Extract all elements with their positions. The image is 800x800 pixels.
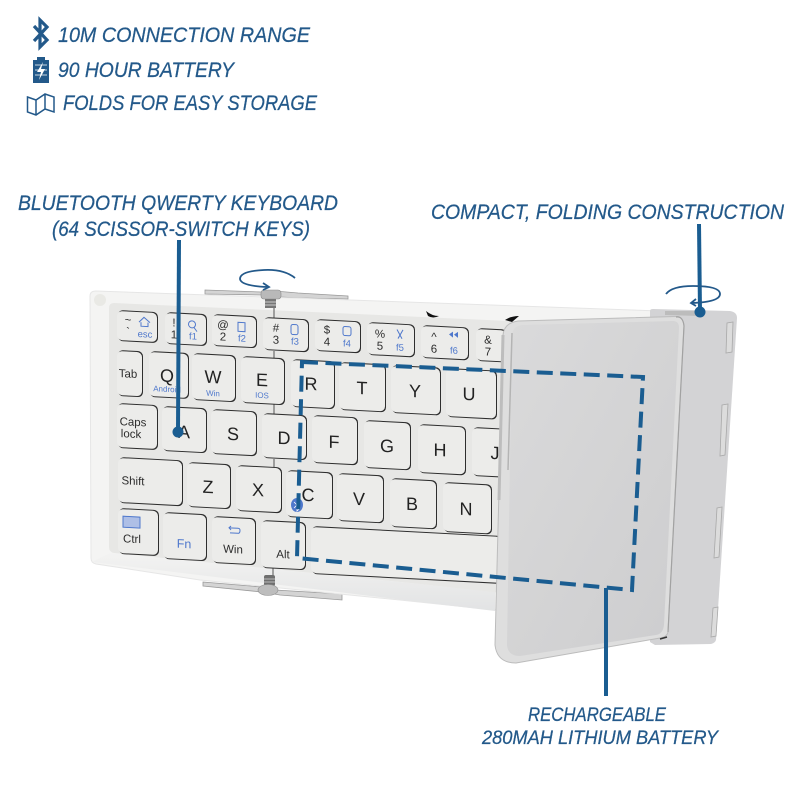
key: V: V <box>353 489 365 509</box>
text: battery life: 90 HOUR BATTERY <box>58 59 236 82</box>
callout: keyboard <box>18 192 338 241</box>
key: Tab <box>117 350 143 397</box>
key: esc: ` <box>126 326 130 339</box>
key: T <box>339 362 386 412</box>
text: folds for storage: FOLDS FOR EASY STORAGE <box>63 92 318 115</box>
key: f5: % <box>375 328 385 341</box>
key: f2: f2 <box>238 333 246 345</box>
key: S: S <box>227 424 239 444</box>
callout: keyboard: BLUETOOTH QWERTY KEYBOARD <box>18 192 338 215</box>
key: f6 <box>421 325 469 360</box>
leader line: folding construction <box>694 224 706 318</box>
feature list <box>28 20 318 115</box>
key: f2: 2 <box>220 331 226 344</box>
key: f3: # <box>273 322 280 335</box>
key: Y: Y <box>409 381 421 402</box>
key: F <box>312 415 358 465</box>
key: S <box>211 409 257 456</box>
key: B <box>390 478 437 529</box>
keys <box>117 310 513 584</box>
key: W: W <box>205 367 221 387</box>
key: Caps lock: Caps <box>120 416 147 429</box>
callout: battery <box>481 705 719 749</box>
key: 7: 7 <box>485 346 491 359</box>
key: f4 <box>315 319 361 353</box>
key: Q: Q <box>160 366 174 386</box>
icon: bluetooth indicator <box>291 498 303 512</box>
key: Fn: Fn <box>177 537 191 551</box>
key: esc: esc <box>138 329 153 341</box>
key: f2 <box>212 314 257 348</box>
callout: battery: 280MAH LITHIUM BATTERY <box>481 728 719 749</box>
key: G <box>364 420 411 470</box>
callout: keyboard: (64 SCISSOR-SWITCH KEYS) <box>52 218 310 241</box>
key: V <box>337 473 384 523</box>
keyboard body <box>90 291 660 611</box>
key: A <box>162 406 207 453</box>
leader line: keyboard <box>172 240 184 438</box>
key: Win <box>212 516 256 565</box>
key: C <box>286 470 333 519</box>
key: f5: f5 <box>396 342 404 354</box>
key: Q: Android <box>153 384 181 395</box>
key: f4: $ <box>324 324 331 337</box>
key: Fn <box>163 512 207 561</box>
key: H: H <box>434 440 446 460</box>
key: W <box>192 353 236 402</box>
key: J: J <box>491 443 499 463</box>
hinge panel <box>650 309 737 645</box>
icon: battery <box>33 57 49 83</box>
callout: battery: RECHARGEABLE <box>528 705 666 726</box>
key: N: N <box>460 499 472 519</box>
key: Z: Z <box>203 477 213 497</box>
key: D: D <box>278 428 290 448</box>
silver folded panel <box>495 316 684 663</box>
key: Y <box>391 365 441 416</box>
key: T: T <box>357 378 367 398</box>
key: F: F <box>329 432 339 452</box>
key: 7 <box>476 328 507 363</box>
key: f4: f4 <box>343 338 351 350</box>
key: D <box>262 413 307 460</box>
key: R: R <box>305 374 317 394</box>
key: C: C <box>302 485 314 505</box>
key: space <box>311 526 502 584</box>
key: U: U <box>463 384 475 404</box>
top hinge screw <box>261 290 281 308</box>
dashed battery outline <box>297 362 643 590</box>
key: f4: 4 <box>324 336 331 349</box>
key: X <box>236 465 282 513</box>
key: f3: f3 <box>291 336 299 348</box>
top hinge <box>205 290 348 299</box>
key: f1: ! <box>172 317 176 330</box>
key: Alt <box>261 520 306 570</box>
key: Caps lock: lock <box>121 428 141 441</box>
key: f6: f6 <box>450 345 458 357</box>
key: E: E <box>256 370 268 390</box>
key: 7: & <box>484 334 492 347</box>
key: Alt: Alt <box>276 549 291 561</box>
key: f5 <box>367 322 415 357</box>
key: A: A <box>178 422 190 442</box>
key: f1: 1 <box>171 329 177 342</box>
key: Z <box>187 462 231 509</box>
key: esc <box>117 310 158 343</box>
key: Ctrl: Ctrl <box>123 533 141 546</box>
key: f3 <box>263 317 309 352</box>
key: Ctrl <box>118 508 159 556</box>
key: f5: 5 <box>377 340 383 353</box>
key: E <box>241 356 285 405</box>
key: B: B <box>406 494 418 514</box>
key: R <box>291 359 335 409</box>
key: f6: ^ <box>431 331 437 344</box>
key: f1 <box>165 312 207 346</box>
key: J <box>472 427 513 478</box>
key: f6: 6 <box>431 343 437 356</box>
text: connection range: 10M CONNECTION RANGE <box>58 24 311 47</box>
key: Shift: Shift <box>122 475 145 488</box>
key: H <box>418 424 466 475</box>
key: N <box>443 482 492 535</box>
key: Shift <box>118 457 183 506</box>
key: U <box>446 368 497 420</box>
leader line: battery <box>604 588 608 696</box>
arrow: hinge rotation left <box>240 270 295 290</box>
key: Win: Win <box>223 544 243 557</box>
key: X: X <box>252 480 264 500</box>
arrow: hinge rotation right <box>666 286 720 306</box>
key: f1: f1 <box>189 331 197 343</box>
key: W: Win <box>206 389 220 398</box>
key: Q <box>149 351 189 399</box>
key: f3: 3 <box>273 334 279 347</box>
key: esc: ~ <box>125 314 132 327</box>
icon: bluetooth <box>34 20 47 47</box>
key: f2: @ <box>217 319 229 332</box>
bottom hinge screw <box>258 575 278 596</box>
key: G: G <box>380 436 394 457</box>
key: Tab: Tab <box>119 368 137 381</box>
key: E: IOS <box>255 391 269 400</box>
key: Caps lock <box>117 403 158 450</box>
bottom hinge <box>203 582 342 600</box>
icon: folding map <box>28 94 54 115</box>
